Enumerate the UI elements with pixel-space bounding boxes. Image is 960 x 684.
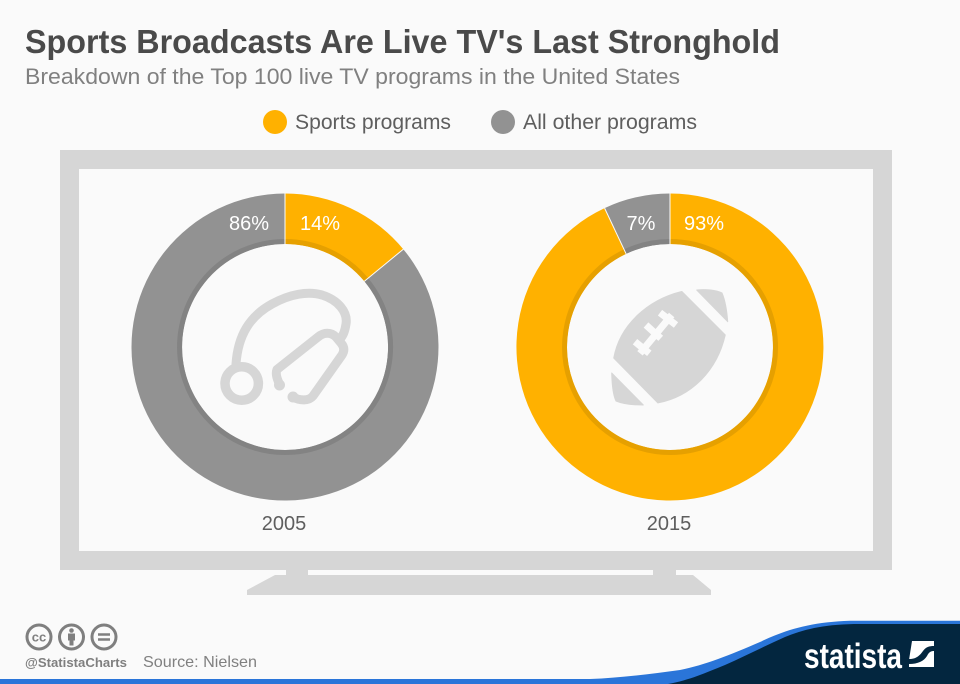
icon: no derivatives [92,625,116,649]
handle: @StatistaCharts [25,655,127,670]
label 14%: 14% [300,213,340,235]
label 93%: 93% [684,213,724,235]
legend [263,110,697,134]
tv screen frame [60,150,892,570]
year label 2005: 2005 [262,513,306,535]
footer band [0,621,960,684]
legend: all other programs: All other programs [523,111,697,134]
year label 2015: 2015 [647,513,691,535]
donut chart 2015 [516,193,823,500]
donut chart 2005 [131,194,438,500]
segment: sports programs 93% [516,194,823,500]
segment: all other programs 7% [605,193,670,254]
icon: attribution [60,625,84,649]
label 7%: 7% [627,213,656,235]
icon: cc: cc [32,630,46,644]
inner shadow ring [180,241,391,452]
icon: football [612,290,728,405]
segment: sports programs 14% [285,194,403,281]
statista logo: statista [804,637,902,676]
icon: stethoscope [225,293,346,402]
title: Sports Broadcasts Are Live TV's Last Stronghold [25,23,780,60]
subtitle: Breakdown of the Top 100 live TV programs in the United States [25,64,680,89]
licence icons [27,625,116,649]
segment: all other programs 86% [131,194,438,500]
source: Source: Nielsen [143,654,257,671]
logo mark [909,641,934,667]
tv stand [247,569,711,595]
legend: sports programs: Sports programs [295,111,451,134]
inner shadow ring [565,242,776,453]
label 86%: 86% [229,213,269,235]
